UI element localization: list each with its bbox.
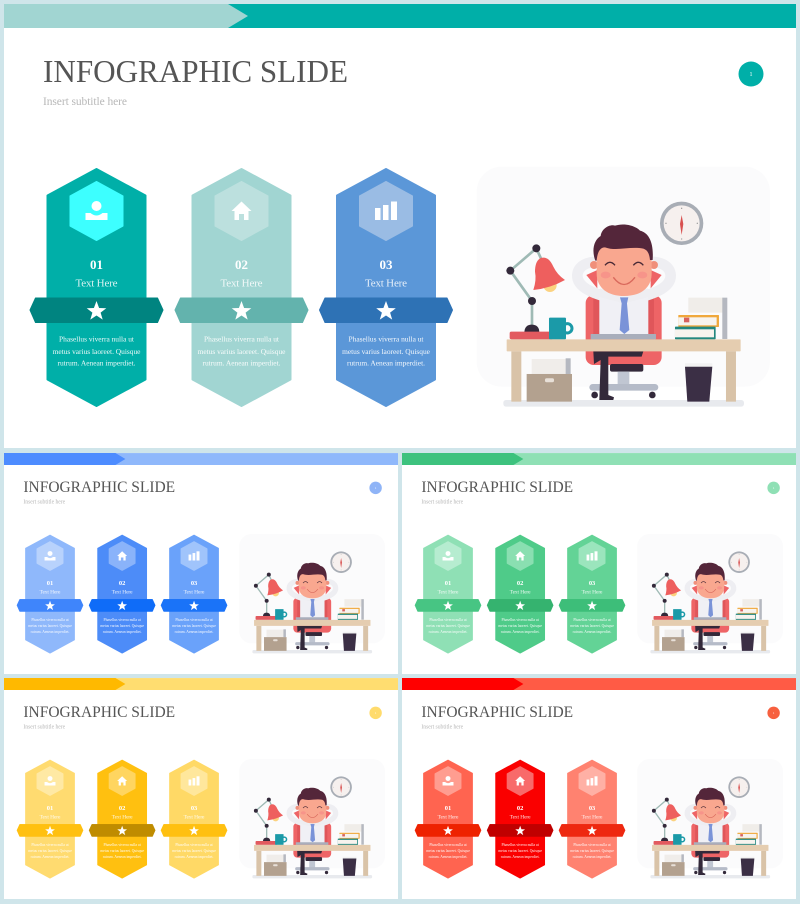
icon: bars [189,776,200,786]
description: metus varius laoreet. Quisque [498,849,542,853]
panel: main teal slide [4,4,796,448]
header arrow [4,4,248,28]
description: Phasellus viverra nulla ut [31,618,69,622]
card 01 [17,760,83,878]
label: Text Here [40,590,61,596]
icon: star [117,826,127,835]
title: INFOGRAPHIC SLIDE [23,479,175,496]
description: metus varius laoreet. Quisque [570,624,614,628]
card 02 [487,535,553,653]
number 03: 03 [191,580,197,587]
description: metus varius laoreet. Quisque [172,849,216,853]
description: rutrum. Aenean imperdiet. [103,855,142,859]
description: Phasellus viverra nulla ut [502,843,539,847]
label: Text Here [220,278,263,290]
number 03: 03 [191,805,197,812]
title: INFOGRAPHIC SLIDE [421,704,573,721]
label: Text Here [112,815,133,821]
ribbon [415,599,481,612]
icon: person [443,551,453,561]
number 02: 02 [235,257,248,272]
card 02 [89,535,155,653]
description: metus varius laoreet. Quisque [28,849,72,853]
label: Text Here [184,815,205,821]
label: Text Here [510,815,531,821]
ribbon [161,599,227,612]
description: metus varius laoreet. Quisque [498,624,542,628]
description: rutrum. Aenean imperdiet. [501,855,540,859]
description: metus varius laoreet. Quisque [28,624,72,628]
description: metus varius laoreet. Quisque [198,347,286,356]
card 02 [487,760,553,878]
description: metus varius laoreet. Quisque [426,624,470,628]
illustration: man relaxing at desk [637,759,783,878]
description: rutrum. Aenean imperdiet. [58,359,136,368]
number 01: 01 [47,805,53,812]
number 01: 01 [47,580,53,587]
description: rutrum. Aenean imperdiet. [175,855,213,859]
description: Phasellus viverra nulla ut [175,618,213,622]
description: rutrum. Aenean imperdiet. [175,630,213,634]
ribbon [89,824,155,837]
description: rutrum. Aenean imperdiet. [347,359,425,368]
number 03: 03 [589,805,595,812]
icon: person [443,776,453,786]
icon: bars [189,551,200,561]
header bar [402,453,796,465]
label: Text Here [438,590,459,596]
illustration: man relaxing at desk [239,759,385,878]
page number badge [767,482,780,494]
page number badge [369,707,382,719]
subtitle: Insert subtitle here [421,724,464,730]
number 01: 01 [445,805,451,812]
number 02: 02 [517,805,523,812]
label: Text Here [40,815,61,821]
label: Text Here [510,590,531,596]
description: metus varius laoreet. Quisque [100,849,144,853]
ribbon [161,824,227,837]
number 02: 02 [119,580,125,587]
label: Text Here [76,278,118,290]
icon: star [443,601,453,610]
description: Phasellus viverra nulla ut [104,843,141,847]
panel: red slide [402,678,796,899]
icon: star [587,826,597,835]
description: metus varius laoreet. Quisque [426,849,470,853]
page number badge: 1 [773,486,775,490]
icon: star [189,826,199,835]
ribbon [487,599,553,612]
description: Phasellus viverra nulla ut [573,618,611,622]
card 03 [559,760,625,878]
icon: bars [375,202,397,220]
subtitle: Insert subtitle here [23,499,66,505]
description: Phasellus viverra nulla ut [573,843,611,847]
description: rutrum. Aenean imperdiet. [501,630,540,634]
page number badge [369,482,382,494]
description: rutrum. Aenean imperdiet. [429,630,467,634]
header bar [402,678,796,690]
page number badge: 1 [773,711,775,715]
header arrow [402,453,523,465]
subtitle: Insert subtitle here [43,96,127,108]
description: Phasellus viverra nulla ut [204,335,280,344]
label: Text Here [582,590,603,596]
number 03: 03 [380,257,393,272]
title: INFOGRAPHIC SLIDE [421,479,573,496]
page number badge: 1 [375,711,377,715]
icon: star [515,826,525,835]
icon: person [45,776,55,786]
card 01 [415,535,481,653]
icon: star [45,826,55,835]
description: Phasellus viverra nulla ut [104,618,141,622]
illustration: man relaxing at desk [477,167,770,407]
card 01 [415,760,481,878]
icon: person [86,201,108,220]
icon: star [515,601,525,610]
ribbon [559,824,625,837]
icon: bars [587,776,598,786]
subtitle: Insert subtitle here [421,499,464,505]
description: rutrum. Aenean imperdiet. [31,855,69,859]
number 01: 01 [445,580,451,587]
label: Text Here [582,815,603,821]
ribbon [415,824,481,837]
description: Phasellus viverra nulla ut [349,335,424,344]
card 03 [161,535,227,653]
description: Phasellus viverra nulla ut [429,618,467,622]
title: INFOGRAPHIC SLIDE [43,53,348,89]
icon: house [117,551,127,561]
icon: house [515,551,525,561]
ribbon [30,298,163,322]
number 02: 02 [119,805,125,812]
subtitle: Insert subtitle here [23,724,66,730]
page number badge: 1 [750,72,752,78]
page number badge [767,707,780,719]
label: Text Here [112,590,133,596]
ribbon [17,599,83,612]
icon: star [87,301,106,320]
icon: star [376,301,396,320]
ribbon [17,824,83,837]
card 02 [175,169,308,406]
number 03: 03 [589,580,595,587]
description: metus varius laoreet. Quisque [342,347,431,356]
card 02 [89,760,155,878]
icon: person [45,551,55,561]
description: rutrum. Aenean imperdiet. [573,630,611,634]
icon: house [117,776,127,786]
description: rutrum. Aenean imperdiet. [202,359,281,368]
header arrow [4,678,125,690]
description: metus varius laoreet. Quisque [53,347,141,356]
card 03 [320,169,452,406]
card 03 [559,535,625,653]
ribbon [89,599,155,612]
icon: star [443,826,453,835]
ribbon [487,824,553,837]
panel: blue slide [4,453,398,674]
number 01: 01 [90,257,103,272]
description: rutrum. Aenean imperdiet. [573,855,611,859]
icon: house [232,202,252,220]
description: Phasellus viverra nulla ut [429,843,467,847]
icon: house [515,776,525,786]
ribbon [559,599,625,612]
header arrow [4,453,125,465]
label: Text Here [184,590,205,596]
description: Phasellus viverra nulla ut [175,843,213,847]
page number badge: 1 [375,486,377,490]
number 02: 02 [517,580,523,587]
description: rutrum. Aenean imperdiet. [31,630,69,634]
description: Phasellus viverra nulla ut [59,335,135,344]
description: rutrum. Aenean imperdiet. [103,630,142,634]
icon: star [587,601,597,610]
card 03 [161,760,227,878]
header arrow [402,678,523,690]
header bar [4,453,398,465]
description: rutrum. Aenean imperdiet. [429,855,467,859]
panel: green slide [402,453,796,674]
description: metus varius laoreet. Quisque [172,624,216,628]
ribbon [320,298,452,322]
description: metus varius laoreet. Quisque [100,624,144,628]
icon: star [232,301,251,320]
page number badge [738,62,764,86]
card 01 [30,169,163,406]
description: Phasellus viverra nulla ut [31,843,69,847]
label: Text Here [365,278,407,290]
ribbon [175,298,308,322]
description: Phasellus viverra nulla ut [502,618,539,622]
icon: bars [587,551,598,561]
card 01 [17,535,83,653]
icon: star [189,601,199,610]
label: Text Here [438,815,459,821]
header bar [4,678,398,690]
icon: star [117,601,127,610]
header bar [4,4,796,28]
description: metus varius laoreet. Quisque [570,849,614,853]
icon: star [45,601,55,610]
panel: yellow slide [4,678,398,899]
illustration: man relaxing at desk [637,534,783,653]
illustration: man relaxing at desk [239,534,385,653]
title: INFOGRAPHIC SLIDE [23,704,175,721]
